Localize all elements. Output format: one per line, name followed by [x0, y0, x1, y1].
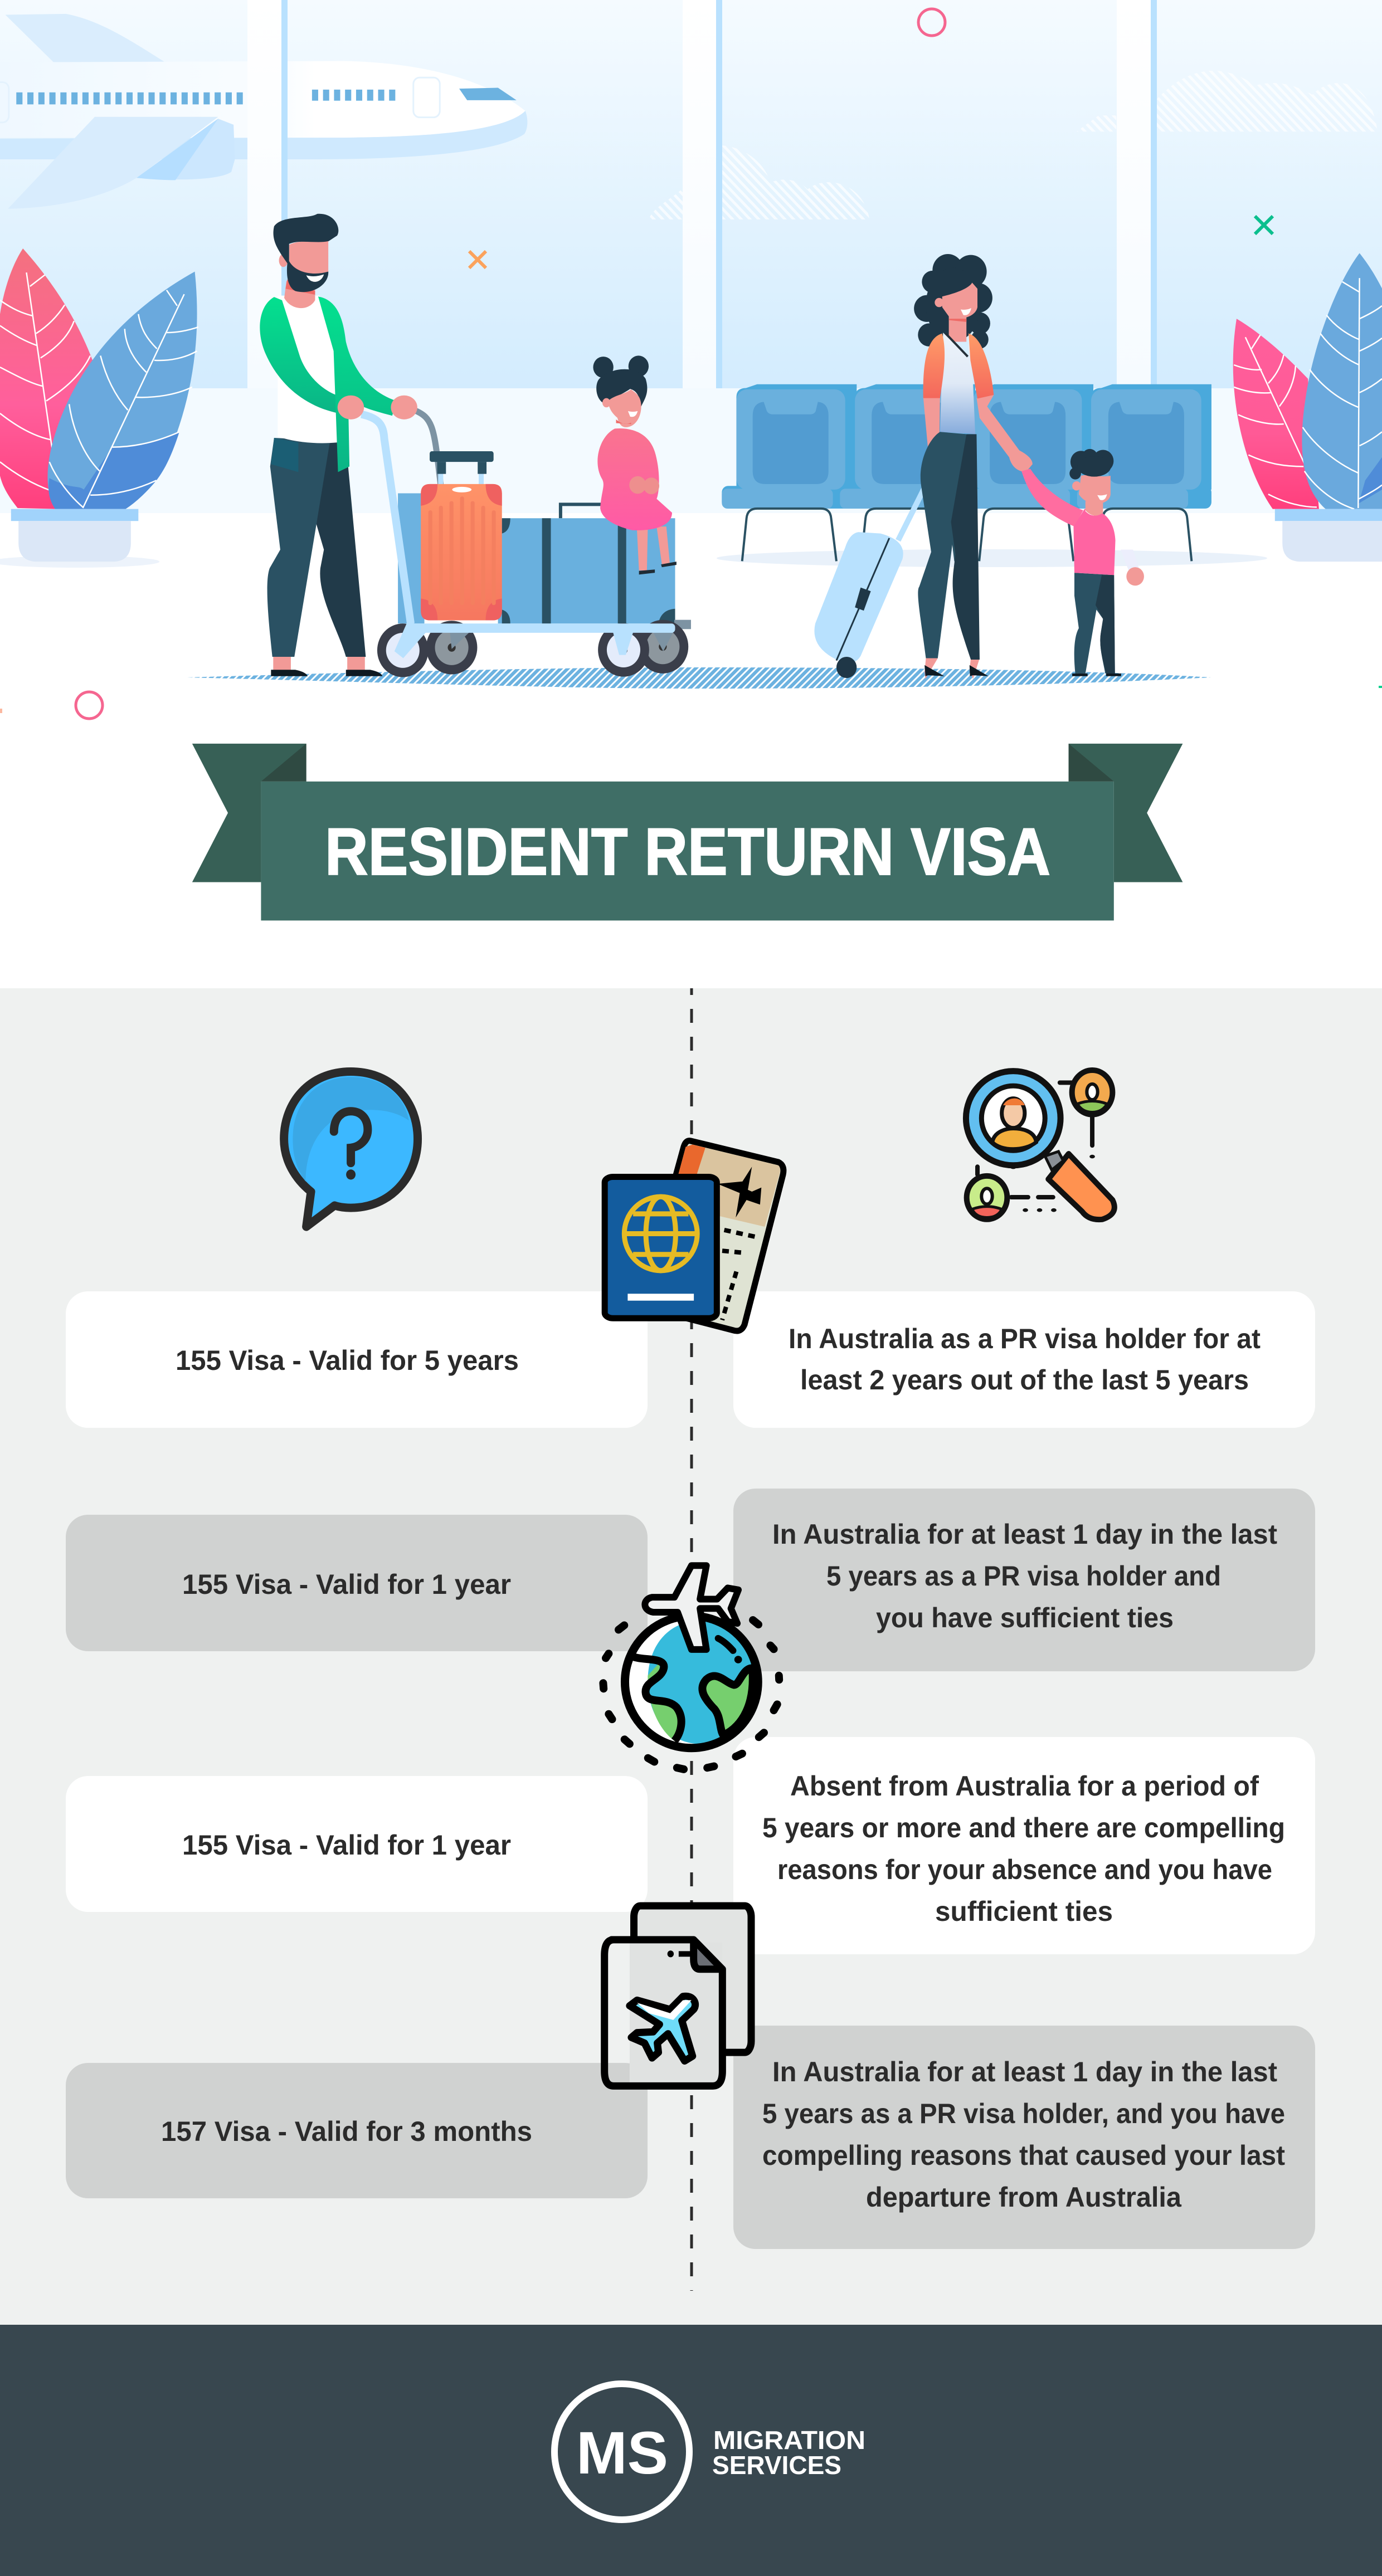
- card: sufficient ties: In Australia for at least 1 day in the last: [772, 1519, 1277, 1550]
- card: absent from Australia: 5 years or more and there are compelling: [762, 1812, 1285, 1843]
- card: sufficient ties: you have sufficient ties: [876, 1602, 1174, 1633]
- plant: right: [1233, 253, 1382, 562]
- icon: question speech bubble: [284, 1071, 418, 1227]
- card: 157 visa: 157 Visa - Valid for 3 months: [161, 2116, 532, 2147]
- card: sufficient ties: [733, 1489, 1315, 1671]
- plant: left: [0, 248, 198, 568]
- icon: travel documents: [605, 1906, 751, 2086]
- floor: [0, 513, 1382, 988]
- floor shadow behind seats: [717, 549, 1267, 567]
- centre dashed timeline: [690, 988, 693, 2291]
- card: absent from Australia: Absent from Australia for a period of: [790, 1770, 1259, 1802]
- clouds: [649, 71, 1378, 219]
- decorative marks: [0, 9, 1382, 719]
- airplane: [0, 14, 527, 209]
- logo ring: [554, 2384, 689, 2520]
- woman with suitcase: [814, 254, 1033, 679]
- card: departure from Australia: compelling reasons that caused your last: [762, 2140, 1285, 2171]
- luggage cart with suitcases: [361, 410, 691, 677]
- card: PR visa holder 2 of 5 years: least 2 years out of the last 5 years: [800, 1364, 1249, 1396]
- title: RESIDENT RETURN VISA: [325, 814, 1050, 889]
- card: absent from Australia: reasons for your absence and you have: [777, 1854, 1272, 1885]
- panel: grey content background: [0, 988, 1382, 2325]
- card: 157 visa: [66, 2063, 648, 2198]
- card: departure from Australia: 5 years as a PR visa holder, and you have: [762, 2098, 1285, 2129]
- card: departure from Australia: departure from Australia: [866, 2182, 1182, 2213]
- title ribbon banner: [192, 744, 1183, 920]
- window columns: [247, 0, 1157, 388]
- icon: magnifier searching people: [966, 1070, 1115, 1219]
- illustration: airport scene: [0, 0, 1382, 988]
- boy holding hands: [1021, 449, 1144, 676]
- footer logo: Migration Services: [554, 2384, 865, 2520]
- icon: globe with airplane: [603, 1565, 779, 1769]
- card: departure from Australia: [733, 2026, 1315, 2249]
- logo wordmark line 2: SERVICES: [712, 2451, 841, 2480]
- card: 155 visa 1 year with compelling reasons: 155 Visa - Valid for 1 year: [182, 1829, 511, 1861]
- window panes: [0, 0, 1382, 388]
- man pushing cart: [260, 214, 417, 676]
- icon: passport and boarding pass: [605, 1141, 784, 1331]
- card: 155 visa 5 years: [66, 1291, 648, 1428]
- airport wall background: [0, 0, 1382, 513]
- card: sufficient ties: 5 years as a PR visa holder and: [826, 1560, 1221, 1592]
- card: PR visa holder 2 of 5 years: [733, 1291, 1315, 1428]
- card: 155 visa 1 year with ties: 155 Visa - Valid for 1 year: [182, 1569, 511, 1600]
- card: absent from Australia: sufficient ties: [935, 1896, 1113, 1927]
- card: 155 visa 1 year with ties: [66, 1515, 648, 1651]
- card: 155 visa 5 years: 155 Visa - Valid for 5 years: [176, 1345, 519, 1376]
- card: absent from Australia: [733, 1737, 1315, 1954]
- panel: footer: [0, 2325, 1382, 2576]
- logo wordmark line 1: MIGRATION: [713, 2426, 865, 2455]
- card: 155 visa 1 year with compelling reasons: [66, 1776, 648, 1912]
- card: PR visa holder 2 of 5 years: In Australia as a PR visa holder for at: [789, 1323, 1261, 1354]
- card: departure from Australia: In Australia for at least 1 day in the last: [772, 2056, 1277, 2087]
- hatched ground shadow: [187, 667, 1211, 689]
- girl sitting on suitcase: [593, 355, 677, 574]
- row of airport seats: [722, 384, 1211, 561]
- logo monogram: MS: [576, 2419, 668, 2486]
